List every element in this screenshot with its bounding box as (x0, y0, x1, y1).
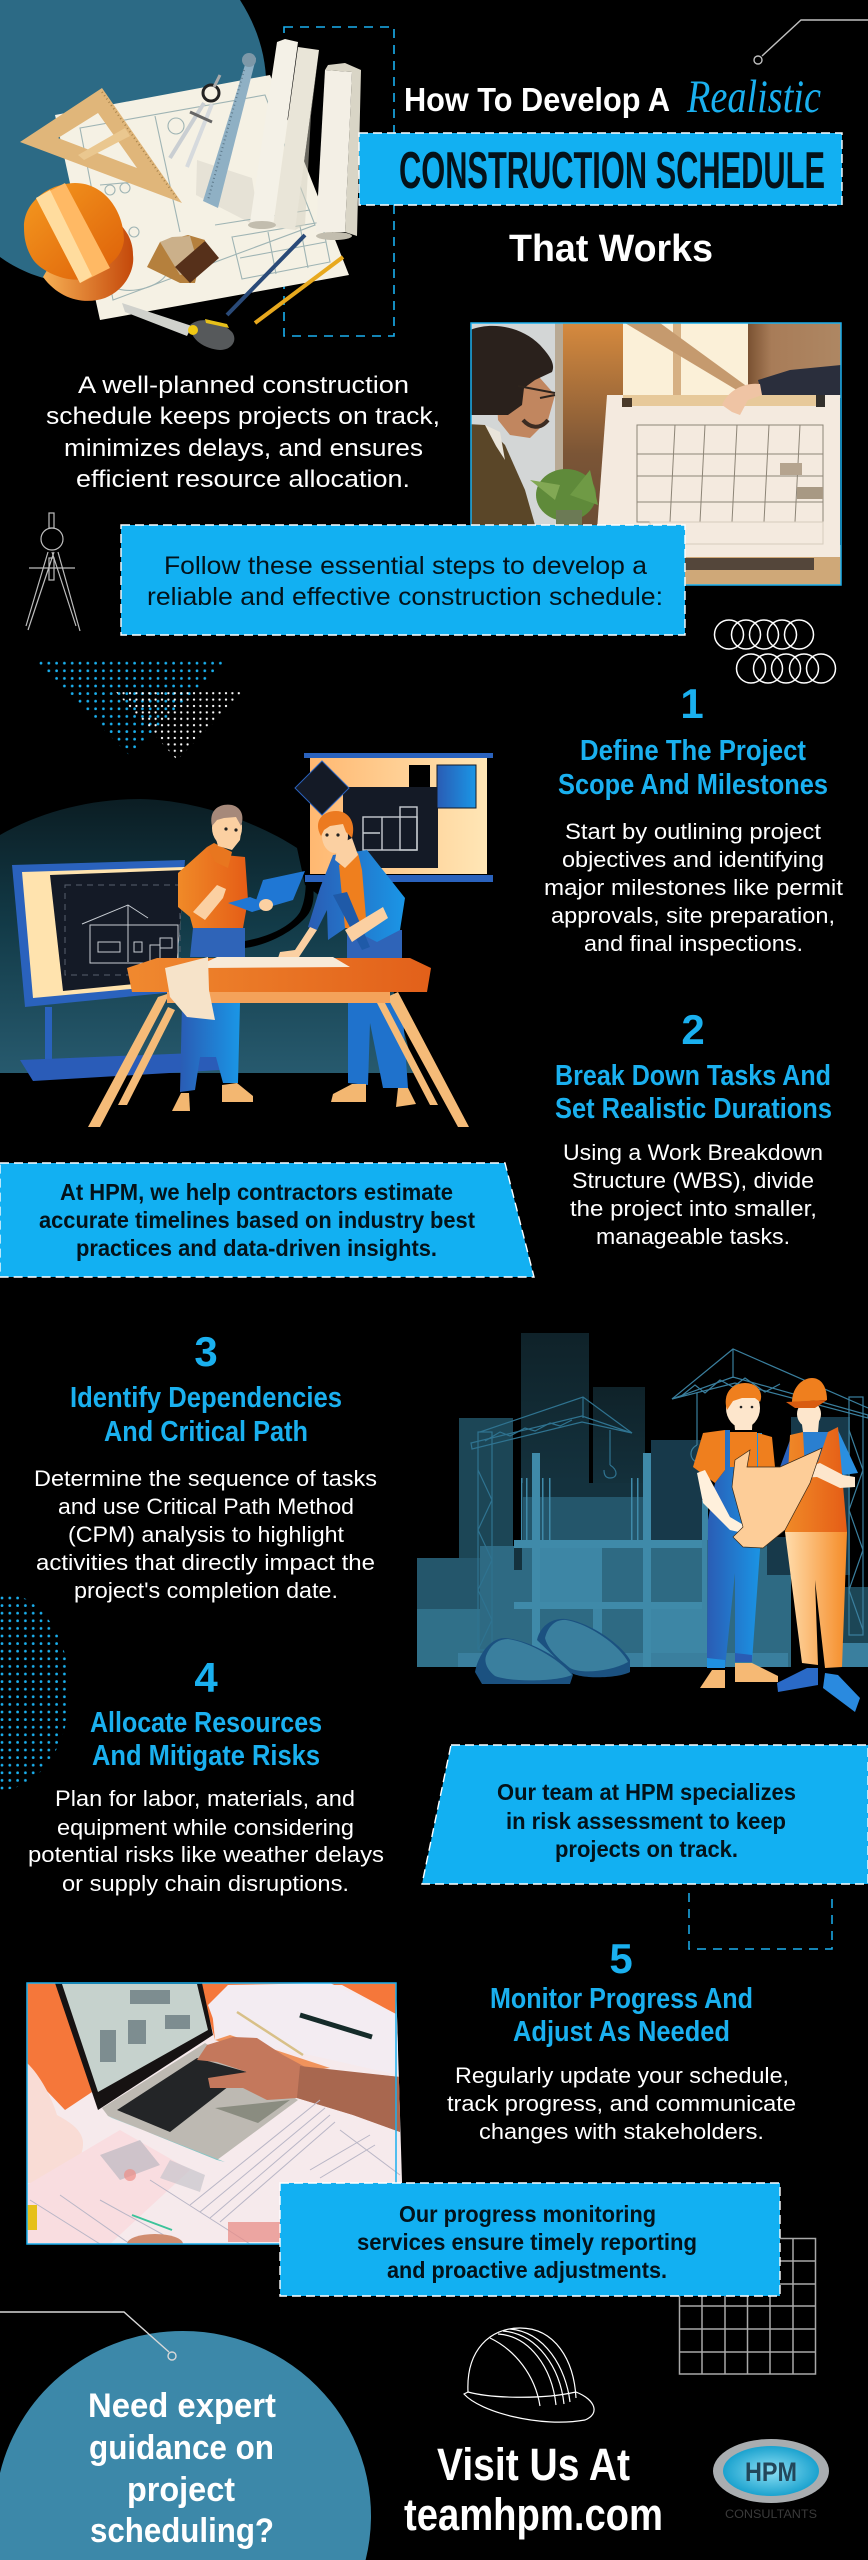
colour swatches (147, 235, 219, 283)
right crane (672, 1349, 868, 1635)
step body: Structure (WBS), divide (572, 1168, 814, 1193)
call-to-action text: guidance on (89, 2429, 274, 2467)
dotted half circle left (0, 1592, 70, 1790)
callout: progress monitoring (280, 2183, 780, 2296)
hard hat (24, 183, 133, 301)
callout: risk assessment: Our team at HPM specializes (497, 1779, 796, 1805)
title band (359, 133, 842, 205)
grid decoration (679, 2238, 816, 2374)
city blocks (417, 1333, 868, 1667)
step heading: Monitor Progress And (490, 1983, 753, 2015)
callout: HPM timelines: At HPM, we help contractors estimate (60, 1179, 453, 1205)
white dotted triangle (116, 692, 244, 760)
title line one: How To Develop A (404, 81, 670, 118)
decorative line bottom left (0, 2312, 176, 2360)
step heading: And Mitigate Risks (92, 1740, 320, 1772)
HPM logo (713, 2439, 829, 2521)
step body: (CPM) analysis to highlight (68, 1522, 345, 1547)
step heading (490, 1983, 753, 2048)
step 2 (555, 1006, 832, 1249)
step body: and final inspections. (584, 931, 803, 956)
step heading: Define The Project (580, 735, 806, 767)
left plan board (12, 860, 220, 1081)
illustration: blueprint desk items (20, 39, 361, 350)
black arc across mound (245, 853, 314, 948)
icon: drafting compass outline (26, 513, 80, 631)
left crane (471, 1397, 632, 1650)
step body: Plan for labor, materials, and (55, 1786, 355, 1811)
step body: project's completion date. (74, 1578, 338, 1603)
teal mound behind illustration (0, 799, 415, 1073)
step heading (70, 1382, 342, 1448)
dashed frame behind header illustration (284, 27, 394, 336)
step body: Regularly update your schedule, (455, 2063, 789, 2088)
step body: approvals, site preparation, (551, 903, 835, 928)
step body: major milestones like permit (544, 875, 844, 900)
step number: 4 (194, 1654, 218, 1701)
callout: risk assessment: projects on track. (555, 1836, 738, 1862)
rubble rocks (475, 1619, 630, 1684)
engineer two (278, 811, 416, 1107)
right plan board (295, 753, 493, 882)
intro paragraph: A well-planned construction (78, 372, 409, 399)
step body: activities that directly impact the (36, 1550, 375, 1575)
step body (447, 2063, 796, 2144)
step body: Using a Work Breakdown (563, 1140, 823, 1165)
intro paragraph: efficient resource allocation. (76, 466, 410, 493)
call-to-action text: scheduling? (90, 2512, 274, 2550)
drafting compass (170, 75, 220, 167)
step body: track progress, and communicate (447, 2091, 796, 2116)
step heading: Adjust As Needed (513, 2016, 730, 2048)
step body: Start by outlining project (565, 819, 822, 844)
illustration: two engineers at a drafting table (12, 753, 493, 1127)
HPM logo: HPM (745, 2457, 797, 2487)
step heading: And Critical Path (104, 1416, 308, 1448)
steel ruler (203, 53, 256, 208)
worker one (693, 1383, 778, 1688)
step heading (90, 1707, 322, 1772)
worker two (777, 1378, 860, 1712)
HPM logo: CONSULTANTS (725, 2507, 817, 2521)
teal call-to-action circle (0, 2331, 371, 2560)
blue pencil (227, 235, 305, 315)
illustration: city construction with two workers (417, 1333, 868, 1712)
step heading: Break Down Tasks And (555, 1060, 831, 1092)
call-to-action text: Need expert (88, 2387, 276, 2425)
callout: progress monitoring: Our progress monitoring (399, 2201, 656, 2227)
step body: the project into smaller, (570, 1196, 817, 1221)
step number: 1 (680, 680, 704, 727)
step body: objectives and identifying (562, 847, 824, 872)
visit us text (404, 2439, 663, 2540)
callout: follow these steps: Follow these essential steps to develop a (164, 552, 647, 580)
title line three: That Works (509, 228, 713, 270)
callout: risk assessment: in risk assessment to keep (506, 1808, 786, 1834)
visit us text: Visit Us At (437, 2439, 630, 2490)
step 4 (28, 1654, 384, 1896)
step body: or supply chain disruptions. (62, 1871, 349, 1896)
callout: risk assessment (422, 1745, 868, 1884)
step body (28, 1786, 384, 1896)
step body (34, 1466, 377, 1603)
tape measure (122, 303, 234, 350)
step body: potential risks like weather delays (28, 1842, 384, 1867)
title accent word: Realistic (686, 71, 821, 123)
step heading (555, 1060, 832, 1125)
step 3 (34, 1328, 377, 1603)
step heading: Scope And Milestones (558, 769, 828, 801)
step body: equipment while considering (57, 1815, 354, 1840)
step body: changes with stakeholders. (479, 2119, 764, 2144)
callout: progress monitoring: services ensure timely reporting (357, 2229, 697, 2255)
title (359, 71, 842, 270)
intro paragraph (46, 372, 440, 493)
drafting table (88, 957, 469, 1127)
step heading: Identify Dependencies (70, 1382, 342, 1414)
step body (563, 1140, 823, 1249)
rolled plans (248, 39, 361, 240)
blue dotted triangle (33, 659, 227, 756)
yellow pencil (255, 257, 343, 323)
step body (544, 819, 844, 956)
step number: 5 (609, 1935, 633, 1982)
intro paragraph: minimizes delays, and ensures (64, 435, 423, 462)
icon: hard hat outline (464, 2328, 594, 2422)
callout: HPM timelines (0, 1163, 534, 1277)
step body: and use Critical Path Method (58, 1494, 354, 1519)
call-to-action text: project (127, 2471, 235, 2509)
decorative rings (714, 620, 836, 683)
step heading: Allocate Resources (90, 1707, 322, 1739)
callout: HPM timelines: accurate timelines based on industry best (39, 1207, 475, 1233)
step body: Determine the sequence of tasks (34, 1466, 377, 1491)
callout: follow these steps: reliable and effective construction schedule: (147, 583, 663, 611)
callout: follow these steps (121, 525, 685, 635)
callout: HPM timelines: practices and data-driven insights. (76, 1235, 437, 1261)
intro paragraph: schedule keeps projects on track, (46, 403, 440, 430)
step heading (558, 735, 828, 801)
photo: man reviewing schedule board (465, 323, 841, 585)
blueprint sheet (55, 75, 349, 320)
photo: hand on laptop over plans (27, 1983, 403, 2254)
step body: manageable tasks. (596, 1224, 790, 1249)
step number: 2 (681, 1006, 705, 1053)
engineer one (172, 805, 305, 1111)
visit us text: teamhpm.com (404, 2489, 663, 2540)
step 5 (447, 1935, 796, 2144)
step number: 3 (194, 1328, 218, 1375)
call-to-action text (88, 2387, 276, 2550)
set square (20, 88, 182, 203)
decorative line top right (754, 20, 868, 64)
step heading: Set Realistic Durations (555, 1093, 832, 1125)
blueprint held by workers (732, 1448, 822, 1548)
dashed frame near step 5 (689, 1893, 832, 1949)
callout: progress monitoring: and proactive adjustments. (387, 2257, 667, 2283)
step 1 (544, 680, 844, 956)
teal circle top left (0, 0, 266, 281)
